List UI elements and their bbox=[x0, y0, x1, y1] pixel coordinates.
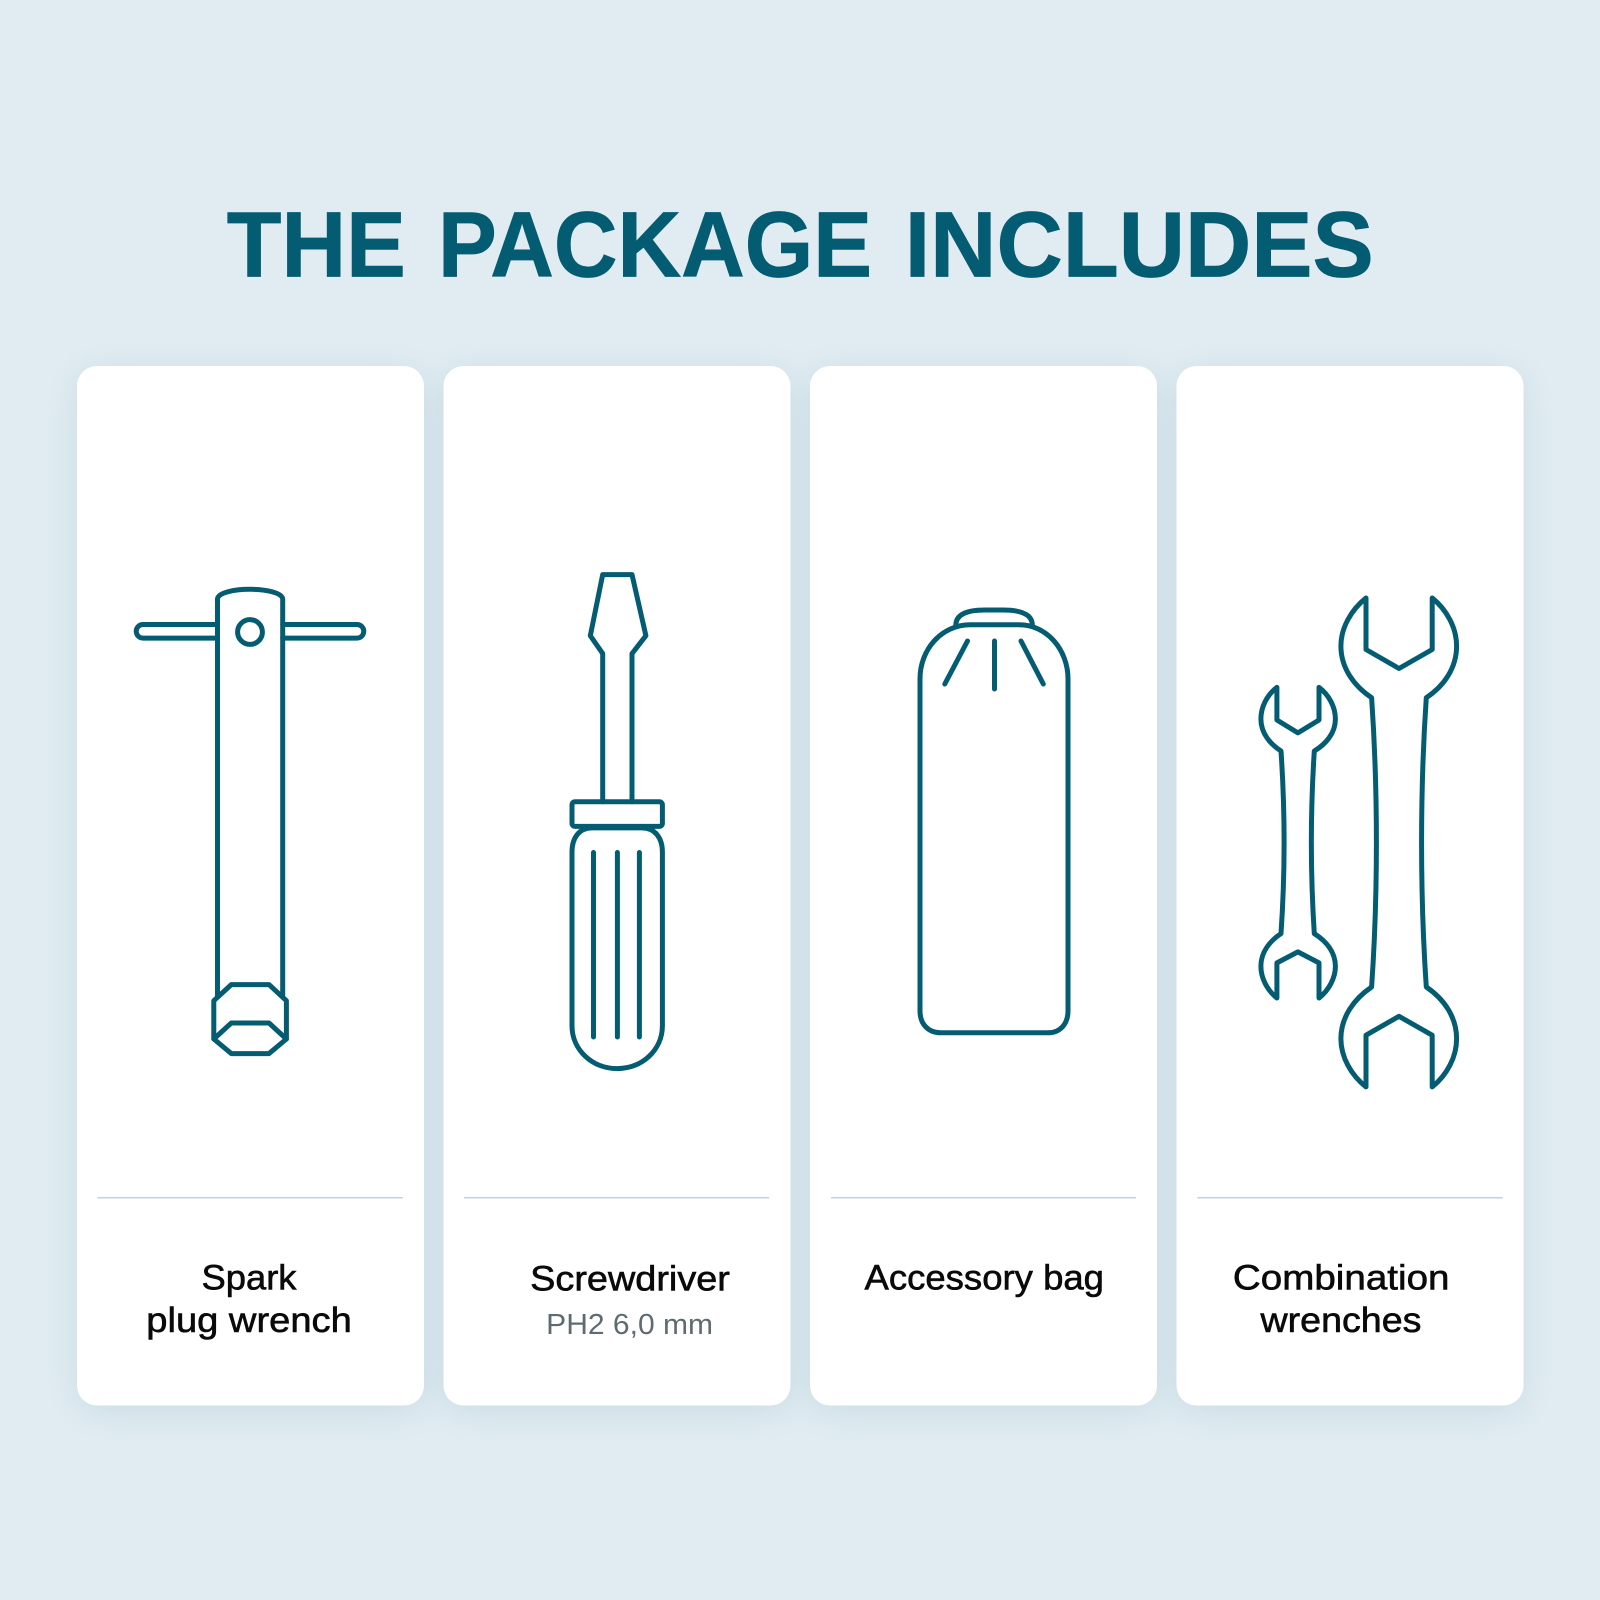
label: combination wrenches: wrenches bbox=[1259, 1301, 1421, 1340]
title bbox=[227, 192, 1374, 296]
label: spark plug wrench: plug wrench bbox=[146, 1301, 352, 1340]
title: PACKAGE bbox=[438, 192, 872, 296]
label: screwdriver: PH2 6,0 mm bbox=[546, 1309, 713, 1341]
label: spark plug wrench bbox=[146, 1258, 352, 1340]
label: accessory bag: Accessory bag bbox=[864, 1258, 1104, 1297]
panel: combination wrenches bbox=[1176, 366, 1524, 1406]
label: screwdriver bbox=[530, 1260, 730, 1341]
title: THE bbox=[227, 192, 406, 296]
icon: accessory bag bbox=[920, 610, 1068, 1033]
label: combination wrenches: Combination bbox=[1233, 1258, 1450, 1298]
icon: small wrench bbox=[1261, 687, 1335, 998]
label: combination wrenches bbox=[1233, 1258, 1450, 1340]
icon: large wrench bbox=[1341, 598, 1457, 1087]
icon: combination wrenches bbox=[1261, 598, 1457, 1087]
label: screwdriver: Screwdriver bbox=[530, 1260, 730, 1299]
icon: screwdriver bbox=[572, 575, 662, 1069]
panel: accessory bag bbox=[810, 366, 1157, 1406]
title: INCLUDES bbox=[905, 192, 1374, 296]
panel: screwdriver bbox=[444, 366, 790, 1406]
icon: spark plug wrench bbox=[136, 589, 364, 1054]
panel: spark plug wrench bbox=[77, 366, 424, 1406]
label: spark plug wrench: Spark bbox=[202, 1258, 297, 1298]
